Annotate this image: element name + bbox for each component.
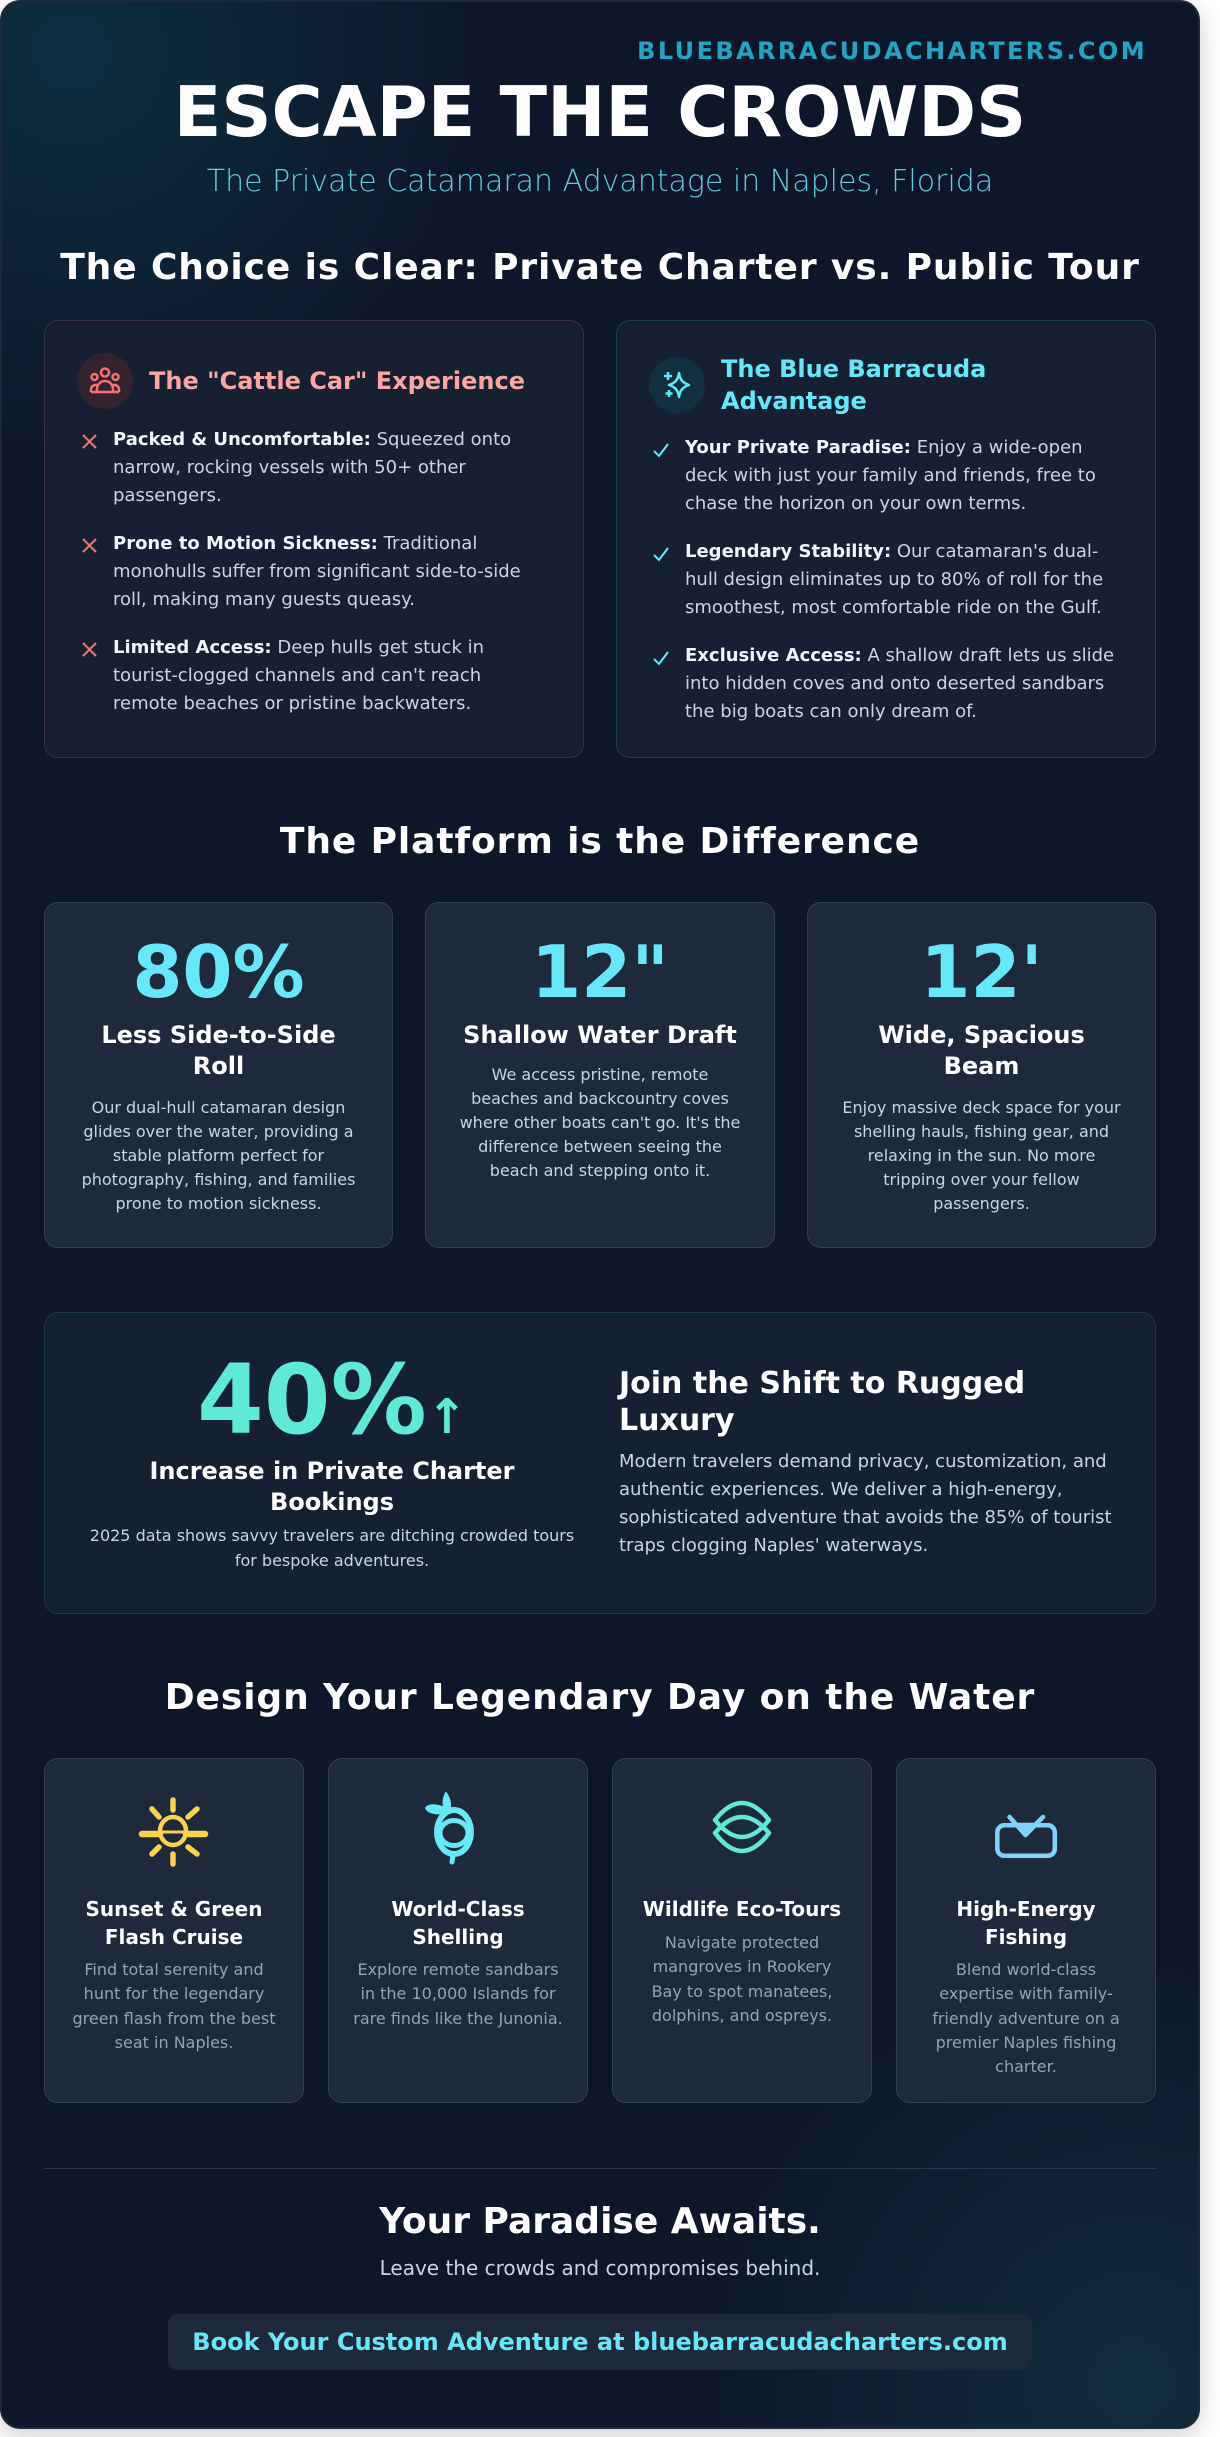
list item: motion sickness: monohulls suffer from significant side-to-side bbox=[113, 561, 521, 582]
subtitle: The Private Catamaran Advantage in Naples, Florida bbox=[207, 164, 993, 199]
list item: motion sickness bbox=[82, 533, 521, 610]
list item: packed: passengers. bbox=[113, 485, 222, 506]
feature card: fishing bbox=[896, 1758, 1156, 2103]
stat description: glides over the water, providing a bbox=[83, 1122, 354, 1141]
list item: packed bbox=[82, 429, 511, 506]
list item: exclusive access: Exclusive Access: A shallow draft lets us slide bbox=[685, 645, 1114, 666]
icon: sun on horizon bbox=[138, 1797, 208, 1867]
list item: exclusive access bbox=[653, 645, 1114, 722]
stat description: difference between seeing the bbox=[478, 1137, 722, 1156]
stat label: Shallow Water Draft bbox=[463, 1021, 737, 1049]
stat description: beach and stepping onto it. bbox=[490, 1161, 710, 1180]
title: ESCAPE THE CROWDS bbox=[174, 72, 1026, 153]
stat label: Beam bbox=[944, 1052, 1019, 1080]
body text bbox=[619, 1451, 1112, 1556]
call to action button bbox=[168, 2314, 1032, 2370]
list item: motion sickness: Prone to Motion Sickness: Traditional bbox=[113, 533, 477, 554]
stat description: where other boats can't go. It's the bbox=[460, 1113, 740, 1132]
feature title: World-Class bbox=[391, 1897, 525, 1921]
feature description: Navigate protected bbox=[665, 1933, 819, 1952]
list item: limited access: Limited Access: Deep hulls get stuck in bbox=[113, 637, 484, 658]
feature title bbox=[956, 1897, 1096, 1949]
stat description: tripping over your fellow bbox=[883, 1170, 1080, 1189]
stat card: 80% bbox=[44, 902, 393, 1248]
stat description: stable platform perfect for bbox=[113, 1146, 324, 1165]
section heading: design your day: Design Your Legendary Day on the Water bbox=[165, 1677, 1035, 1718]
feature description: charter. bbox=[995, 2057, 1057, 2076]
feature title: Sunset & Green bbox=[86, 1897, 262, 1921]
feature description: in the 10,000 Islands for bbox=[360, 1984, 556, 2003]
stat label: Less Side-to-Side bbox=[101, 1021, 336, 1049]
feature description: expertise with family- bbox=[939, 1984, 1113, 2003]
heading: rugged luxury: Join the Shift to Rugged bbox=[619, 1366, 1025, 1401]
stat description: Our dual-hull catamaran design bbox=[92, 1098, 345, 1117]
feature card: sunset bbox=[44, 1758, 304, 2103]
icon: crowd of people bbox=[77, 353, 133, 409]
list item: legendary stability: hull design eliminates up to 80% of roll for the bbox=[685, 569, 1103, 590]
stat description: 2025 data shows savvy travelers are ditching crowded tours bbox=[90, 1526, 574, 1545]
stat description: beaches and backcountry coves bbox=[471, 1089, 729, 1108]
feature description: Find total serenity and bbox=[84, 1960, 264, 1979]
list item: packed: Packed & Uncomfortable: Squeezed onto bbox=[113, 429, 511, 450]
stat number: 80% bbox=[132, 930, 305, 1014]
feature description: dolphins, and ospreys. bbox=[652, 2006, 832, 2025]
list item: motion sickness: roll, making many guests queasy. bbox=[113, 589, 415, 610]
panel heading: Advantage bbox=[721, 387, 867, 415]
stat card: 12 foot beam bbox=[807, 902, 1156, 1248]
list item: private paradise: Your Private Paradise: Enjoy a wide-open bbox=[685, 437, 1083, 458]
feature title: High-Energy bbox=[956, 1897, 1096, 1921]
feature title: Wildlife Eco-Tours bbox=[643, 1897, 841, 1921]
stat label: Wide, Spacious bbox=[878, 1021, 1085, 1049]
stat label bbox=[101, 1021, 336, 1080]
heading: rugged luxury bbox=[617, 1366, 1025, 1438]
stat card: 12 inch draft bbox=[425, 902, 775, 1248]
stat description: photography, fishing, and families bbox=[82, 1170, 355, 1189]
feature description: Blend world-class bbox=[956, 1960, 1096, 1979]
heading: rugged luxury: Luxury bbox=[619, 1403, 735, 1438]
feature description bbox=[932, 1960, 1120, 2076]
stat description: relaxing in the sun. No more bbox=[868, 1146, 1095, 1165]
stat label bbox=[149, 1457, 515, 1516]
feature title bbox=[391, 1897, 525, 1949]
feature card: shelling bbox=[328, 1758, 588, 2103]
big stat 40 percent: 40%↑ bbox=[197, 1344, 467, 1456]
feature description: mangroves in Rookery bbox=[653, 1957, 831, 1976]
stat description bbox=[460, 1065, 740, 1180]
icon: shell bbox=[425, 1792, 474, 1864]
stat label bbox=[878, 1021, 1085, 1080]
feature description: friendly adventure on a bbox=[932, 2009, 1120, 2028]
panel heading bbox=[721, 355, 986, 415]
list item: packed: narrow, rocking vessels with 50+ other bbox=[113, 457, 466, 478]
feature description bbox=[72, 1960, 276, 2052]
divider bbox=[44, 2168, 1156, 2169]
body text: sophisticated adventure that avoids the 85% of tourist bbox=[619, 1507, 1112, 1528]
website url: BLUEBARRACUDACHARTERS.COM bbox=[637, 37, 1147, 65]
stat description bbox=[82, 1098, 355, 1213]
feature description: Explore remote sandbars bbox=[357, 1960, 559, 1979]
icon: tv-like box bbox=[995, 1814, 1058, 1858]
stat description bbox=[90, 1526, 574, 1570]
stat number: 12' bbox=[920, 930, 1043, 1014]
feature title: Flash Cruise bbox=[105, 1925, 243, 1949]
feature description bbox=[353, 1960, 563, 2028]
section heading: platform: The Platform is the Difference bbox=[280, 821, 920, 862]
list item: exclusive access: the big boats can only dream of. bbox=[685, 701, 977, 722]
list item: limited access: tourist-clogged channels and can't reach bbox=[113, 665, 481, 686]
footer subtext: Leave the crowds and compromises behind. bbox=[380, 2256, 820, 2280]
panel: rugged luxury bbox=[44, 1312, 1156, 1614]
stat number: 12" bbox=[531, 930, 669, 1014]
feature description: Bay to spot manatees, bbox=[652, 1982, 832, 2001]
stat description: We access pristine, remote bbox=[492, 1065, 708, 1084]
list item: legendary stability: smoothest, most comfortable ride on the Gulf. bbox=[685, 597, 1102, 618]
list item: private paradise: deck with just your family and friends, free to bbox=[685, 465, 1096, 486]
feature description: seat in Naples. bbox=[115, 2033, 233, 2052]
body text: Modern travelers demand privacy, customization, and bbox=[619, 1451, 1107, 1472]
icon: layered eye bbox=[712, 1800, 772, 1854]
icon: sparkles bbox=[649, 357, 705, 413]
feature title bbox=[86, 1897, 262, 1949]
list item: limited access bbox=[82, 637, 484, 714]
panel: blue barracuda advantage bbox=[616, 320, 1156, 758]
feature description: rare finds like the Junonia. bbox=[353, 2009, 563, 2028]
list item: private paradise bbox=[653, 437, 1096, 514]
feature description: hunt for the legendary bbox=[84, 1984, 264, 2003]
feature description: premier Naples fishing bbox=[936, 2033, 1116, 2052]
feature description bbox=[652, 1933, 832, 2025]
list item: exclusive access: into hidden coves and onto deserted sandbars bbox=[685, 673, 1104, 694]
feature description: green flash from the best bbox=[72, 2009, 276, 2028]
panel heading: The Blue Barracuda bbox=[721, 355, 986, 383]
stat description bbox=[842, 1098, 1121, 1213]
section heading: comparison: The Choice is Clear: Private Charter vs. Public Tour bbox=[60, 247, 1140, 288]
stat label: Bookings bbox=[270, 1488, 394, 1516]
stat description: shelling hauls, fishing gear, and bbox=[854, 1122, 1109, 1141]
list item: legendary stability bbox=[653, 541, 1103, 618]
stat label: Increase in Private Charter bbox=[149, 1457, 515, 1485]
list item: legendary stability: Legendary Stability: Our catamaran's dual- bbox=[685, 541, 1098, 562]
feature card: wildlife bbox=[612, 1758, 872, 2103]
panel heading: The "Cattle Car" Experience bbox=[149, 367, 525, 395]
feature title: Fishing bbox=[985, 1925, 1067, 1949]
call to action button: Book Your Custom Adventure at bluebarracudacharters.com bbox=[192, 2328, 1008, 2356]
stat description: for bespoke adventures. bbox=[235, 1551, 429, 1570]
body text: traps clogging Naples' waterways. bbox=[619, 1535, 928, 1556]
body text: authentic experiences. We deliver a high-energy, bbox=[619, 1479, 1062, 1500]
stat description: prone to motion sickness. bbox=[115, 1194, 322, 1213]
feature title: Shelling bbox=[412, 1925, 504, 1949]
list item: private paradise: chase the horizon on your own terms. bbox=[685, 493, 1026, 514]
stat label: Roll bbox=[193, 1052, 244, 1080]
stat description: passengers. bbox=[933, 1194, 1030, 1213]
stat description: Enjoy massive deck space for your bbox=[842, 1098, 1121, 1117]
list item: limited access: remote beaches or pristine backwaters. bbox=[113, 693, 471, 714]
footer heading: Your Paradise Awaits. bbox=[379, 2201, 821, 2242]
panel: cattle car experience bbox=[44, 320, 584, 758]
